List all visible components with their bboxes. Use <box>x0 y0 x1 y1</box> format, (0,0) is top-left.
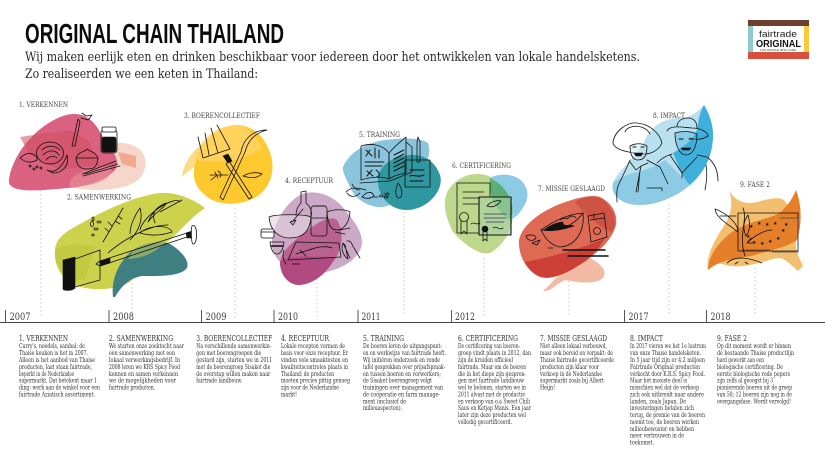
text block: 9 fase 2: de bestaande Thaise productlijn <box>717 350 794 357</box>
text block: 2 samenwerking: een samenwerking met een <box>109 350 175 357</box>
text block: 8 impact: milieubewuster en hebben <box>630 426 694 433</box>
text block: 5 training: de Sisaket boerengroep volgt <box>363 378 432 384</box>
text block: 5 training: De boeren leren de uitgangspunt- <box>363 343 442 350</box>
text block: 7 missie geslaagd: 7. MISSIE GESLAAGD <box>540 333 607 343</box>
icon: european stars: ★ <box>749 224 754 230</box>
text block: 8 impact: misschien wel dat de verkoop <box>630 384 699 392</box>
text block: 9 fase 2: eerste biologische rode pepers <box>717 371 790 378</box>
text block: 5 training: tafel gesprekken over prijsafspraak- <box>363 364 445 371</box>
text block: 5 training: de coöperatie en farm manage- <box>363 392 440 398</box>
text block: 7 missie geslaagd: Thaise fairtrade gecertificeerde <box>540 357 614 364</box>
text block: 1 verkennen: producten, laat staan fairtrade, <box>19 364 92 371</box>
text block: 8 impact: Fairtrade Original producten <box>630 364 700 371</box>
text block: 6 certificering: De certificering van boeren- <box>458 343 520 350</box>
icon: european stars: ★ <box>776 236 781 242</box>
icon: book and document <box>346 137 430 198</box>
text block: 1 verkennen <box>18 333 100 398</box>
blob <box>613 105 713 205</box>
text block: 6 certificering: Saus en Ketjap Manis. Een jaar <box>458 405 531 412</box>
text block: 2 samenwerking: 2. SAMENWERKING <box>109 333 173 343</box>
text block: 8 impact: neemt toe, de boeren werken <box>630 419 699 426</box>
icon: european stars: ★ <box>781 228 786 234</box>
text block: 6 certificering <box>457 333 531 426</box>
text block: 4 receptuur: zijn voor de Nederlandse <box>281 384 339 392</box>
text block: 7 missie geslaagd: Niet alleen lokaal verbouwd, <box>540 343 607 350</box>
logo: fairtrade <box>759 29 797 40</box>
icon: bowl, package <box>526 213 608 256</box>
text block: 5 training <box>363 333 446 412</box>
text block: 2 samenwerking: We starten onze zoektocht naar <box>109 343 184 350</box>
text block: 8 impact: terug, de premie van de boeren <box>630 412 705 419</box>
text block: 8 impact: In 2017 vieren we het 1e lustrum <box>630 343 706 350</box>
text block: 9 fase 2: 9. FASE 2 <box>717 333 747 343</box>
subtitle: Zo realiseerden we een keten in Thailand: <box>25 67 258 82</box>
panel: step 1 verkennen <box>9 100 146 190</box>
text block: 1 verkennen: ding: werk aan de winkel voor een <box>19 384 100 392</box>
text block: 6 certificering: fairtrade. Maar om de boeren <box>458 364 526 371</box>
text block: 1 verkennen: fairtrade Aziatisch assortiment. <box>19 392 95 398</box>
text block: 2 samenwerking: kennen en samen verkennen <box>109 371 178 378</box>
text block: 3 boerencollectief: de overstap willen maken naar <box>196 371 270 378</box>
text block: 4 receptuur <box>280 333 350 398</box>
text block: 2 samenwerking <box>109 333 184 392</box>
panel: step 5 training <box>343 130 441 210</box>
icon: organic plant and eu flag <box>715 208 798 264</box>
text block: 3 boerencollectief: gestard zijn, starten we in 2011 <box>196 357 272 364</box>
text block: 9 fase 2 <box>716 333 794 406</box>
label: 5. TRAINING <box>359 130 400 139</box>
text block: 8 impact: meer vertrouwen in de <box>630 432 684 440</box>
text block: 2 samenwerking: 2008 leren we KRS Spicy Food <box>109 364 180 371</box>
text block: 6 certificering: volledig gecertificeerd. <box>457 419 512 426</box>
text block: 7 missie geslaagd: supermarkt zoals bij Albert <box>540 378 604 384</box>
text block: 1 verkennen: 1. VERKENNEN <box>19 333 68 343</box>
panel: step 7 missie geslaagd <box>519 184 616 291</box>
icon: european stars: ★ <box>784 222 789 228</box>
timeline: 2009 <box>206 312 226 323</box>
text block: 6 certificering: wel te belonen, starten we in <box>458 384 526 392</box>
text block: 3 boerencollectief: met de boerengroep Sisaket die <box>196 364 271 371</box>
text block: 6 certificering: 2011 alvast met de productie <box>458 392 525 398</box>
text block: 4 receptuur: moeten precies pittig genoeg <box>281 378 350 384</box>
text block: 4 receptuur: basis voor onze receptuur. Er <box>281 350 348 357</box>
text block: 4 receptuur: 4. RECEPTUUR <box>281 333 330 343</box>
blob <box>9 114 146 190</box>
timeline <box>0 310 825 323</box>
text block: 6 certificering: 6. CERTIFICERING <box>458 333 518 343</box>
panel: step 3 boerencollectief <box>182 111 273 204</box>
text block: 3 boerencollectief: Na verschillende samenwerkin- <box>196 343 271 350</box>
panel: step 9 fase 2 <box>708 180 803 271</box>
label: 8. IMPACT <box>653 111 685 120</box>
label: 9. FASE 2 <box>740 180 770 189</box>
icon: european stars: ★ <box>773 221 778 227</box>
label: 1. VERKENNEN <box>19 100 68 109</box>
label: 2. SAMENWERKING <box>67 192 131 202</box>
icon: certificates <box>457 183 511 241</box>
text block: 5 training: en en werkwijze van fairtrade heeft. <box>363 350 446 357</box>
icon: european stars: ★ <box>760 241 765 247</box>
text block: 3 boerencollectief <box>196 333 273 384</box>
icon: european stars: ★ <box>746 234 751 240</box>
timeline: 2012 <box>455 312 475 323</box>
timeline: 2011 <box>362 312 380 323</box>
text block: 4 receptuur: markt! <box>281 392 297 398</box>
icon: european stars: ★ <box>765 222 770 228</box>
text block: 4 receptuur: Thailand: de producten <box>281 371 334 378</box>
text block: 7 missie geslaagd <box>539 333 614 392</box>
text block: 6 certificering: zijn de kruiden officieel <box>458 357 513 364</box>
text block: 6 certificering: later zijn deze producten wel <box>458 412 526 419</box>
text block: 8 impact: toekomst. <box>630 440 654 446</box>
text block: 7 missie geslaagd: Heijn! <box>540 384 555 392</box>
blob <box>708 190 803 271</box>
blob <box>519 196 616 291</box>
text block: 7 missie geslaagd: producten zijn klaar voor <box>540 364 599 371</box>
text block: 2 samenwerking: we de mogelijkheden voor <box>109 378 176 384</box>
text block: 8 impact: investeringen betalen zich <box>630 405 694 412</box>
text block: 8 impact: Maar het mooiste doel is <box>630 378 687 384</box>
text block: 8 impact: van onze Thaise handelsketen. <box>629 350 701 357</box>
logo <box>748 20 809 59</box>
text block: 1 verkennen: Alleen is het aanbod van Thaise <box>18 357 95 364</box>
icon: ingredients <box>20 113 120 176</box>
icon: european stars: ★ <box>752 240 757 246</box>
text block: 1 verkennen: Curry's, noedels, sambal: de <box>19 343 85 350</box>
panel: step 2 samenwerking <box>55 192 205 297</box>
timeline: 2010 <box>278 312 298 323</box>
text block: 9 fase 2: biologische certificering. De <box>717 364 783 371</box>
timeline: 2018 <box>710 312 730 323</box>
text block: 6 certificering: die in het diepe zijn gespron- <box>458 371 526 378</box>
text block: 2 samenwerking: lokaal verwerkingsbedrijf. In <box>109 357 180 364</box>
text block: 8 impact: zich ook uitbreidt naar andere <box>630 392 704 398</box>
text block: 5 training: Wij initiëren onderzoek en ronde <box>363 357 440 364</box>
title: ORIGINAL CHAIN THAILAND <box>25 18 284 49</box>
text block: 5 training: milieuaspecten). <box>363 405 402 412</box>
text block: 8 impact <box>629 333 706 446</box>
text block: 6 certificering: en verkoop van o.a Sweet Chili <box>458 398 530 406</box>
blob <box>343 138 441 210</box>
text block: 1 verkennen: supermarkt. Dat betekent maar 1 <box>19 378 97 384</box>
text block: 7 missie geslaagd: verkoop in de Nederlandse <box>539 371 602 378</box>
text block: 1 verkennen: beperkt in de Nederlandse <box>19 371 74 378</box>
text block: 9 fase 2: overgangsfase. Wordt vervolgd! <box>717 398 791 406</box>
icon: european stars: ★ <box>768 239 773 245</box>
text block: 4 receptuur: Lokale recepten vormen de <box>281 343 345 350</box>
icon: two farmers <box>613 118 718 202</box>
text block: 9 fase 2: Op dit moment wordt er binnen <box>717 343 791 350</box>
text block: 5 training: 5. TRAINING <box>363 333 404 343</box>
panel: step 6 certificering <box>445 161 527 253</box>
timeline: 2017 <box>628 312 648 323</box>
blob <box>182 125 273 204</box>
logo: ORIGINAL <box>756 38 802 50</box>
timeline: 2007 <box>10 312 30 323</box>
label: 7. MISSIE GESLAAGD <box>538 184 605 193</box>
icon: pitchfork and sickle <box>198 125 267 200</box>
text block: 9 fase 2: van 50; 12 boeren zijn nog in de <box>716 392 792 398</box>
panel: step 4 receptuur <box>261 176 362 285</box>
text block: 8 impact: verkocht door K.R.S. Spicy Food. <box>629 371 705 378</box>
icon: kitchen utensils <box>261 191 360 264</box>
icon: european stars <box>746 221 789 247</box>
text block: 8 impact: 8. IMPACT <box>630 333 663 343</box>
text block: 4 receptuur: vinden vele smaaktesten en <box>280 357 348 364</box>
text block: 4 receptuur: kwaliteitscontroles plaats in <box>281 364 348 371</box>
blob <box>445 174 527 253</box>
text block: 9 fase 2: zijn zelfs al geoogst bij 3 <box>717 378 773 384</box>
label: 4. RECEPTUUR <box>285 176 333 185</box>
text block: 6 certificering: groep vindt plaats in 2012, dan <box>458 350 531 357</box>
text block: 2 samenwerking: fairtrade producten. <box>109 384 155 392</box>
panel: step 8 impact <box>613 105 718 205</box>
subtitle <box>25 50 640 82</box>
icon: european stars: ★ <box>757 221 762 227</box>
text block: 5 training: ment (inclusief de <box>363 398 406 406</box>
text block: 5 training: trainingen over management van <box>363 384 443 392</box>
text block: 1 verkennen: Thaise keuken is hot in 2007. <box>19 350 88 357</box>
text block: 5 training: en tussen boeren en verwerkers; <box>363 371 441 378</box>
subtitle: Wij maken eerlijk eten en drinken beschikbaar voor iedereen door het ontwikkelen van lokale handelsketens. <box>25 50 640 65</box>
text block: 9 fase 2: hard gewerkt aan een <box>717 357 764 364</box>
text block: 9 fase 2: pionierende boeren uit de groep <box>717 384 792 392</box>
dotted connectors <box>41 190 755 318</box>
logo: FOR PEOPLE WHO CARE <box>760 49 796 52</box>
icon: hoe and herbs <box>63 200 197 290</box>
text block: 8 impact: landen, zoals Japan. De <box>630 398 686 406</box>
blob <box>272 192 362 285</box>
text block: 6 certificering: gen met fairtrade landbouw <box>458 378 525 384</box>
text block: 8 impact: In 5 jaar tijd zijn er 4.2 miljoen <box>630 357 705 364</box>
label: 6. CERTIFICERING <box>452 161 511 170</box>
text block: 3 boerencollectief: 3. BOERENCOLLECTIEF <box>196 333 273 343</box>
blob <box>55 193 205 297</box>
label: 3. BOERENCOLLECTIEF <box>184 111 260 120</box>
timeline: 2008 <box>113 312 134 323</box>
text block: 3 boerencollectief: fairtrade landbouw. <box>196 378 242 384</box>
text block: 3 boerencollectief: gen met boerengroepen die <box>196 350 262 357</box>
text block: 7 missie geslaagd: maar ook bereid en verpakt: de <box>540 350 613 357</box>
